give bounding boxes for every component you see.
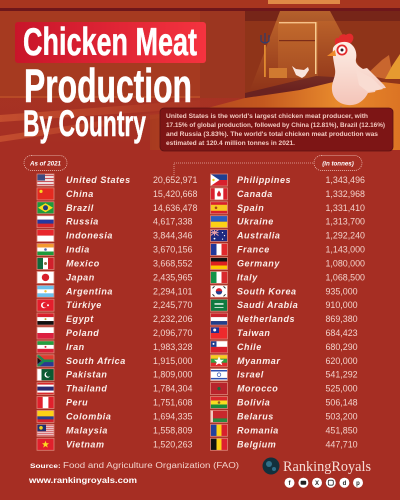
row: Belarus: Belarus [237, 411, 274, 421]
row: Pakistan [37, 369, 193, 381]
row: Türkiye: Türkiye [66, 300, 102, 310]
row: Morocco: 525,000 [326, 384, 358, 394]
label: As of 2021: As of 2021 [29, 160, 62, 168]
row: Chile: Chile [237, 342, 262, 352]
row: China: China [66, 189, 94, 199]
row: Türkiye [37, 299, 193, 311]
summary callout: estimated at 120.4 million tonnes in 2021. [166, 140, 295, 147]
row: Indonesia: 3,844,346 [153, 231, 193, 241]
row: France: France [237, 244, 270, 254]
row: Romania [210, 424, 358, 436]
row: Malaysia: Malaysia [66, 425, 108, 435]
row: Germany [210, 258, 365, 270]
brand name: RankingRoyals [283, 459, 371, 475]
row: Vietnam: 1,520,263 [153, 439, 193, 449]
row: China [37, 188, 197, 200]
row: Mexico: Mexico [66, 258, 100, 268]
row: Myanmar [210, 355, 358, 367]
row: Israel [210, 369, 358, 381]
row: Italy [210, 271, 365, 283]
social icons [284, 478, 363, 488]
website: www.rankingroyals.com [28, 475, 137, 485]
row: Philippines: Philippines [237, 175, 291, 185]
row: Brazil: 14,636,478 [153, 203, 197, 213]
row: Belgium: 447,710 [326, 439, 358, 449]
row: Israel: 541,292 [326, 370, 358, 380]
row: France: 1,143,000 [326, 244, 365, 254]
label: in tonnes: (in tonnes) [322, 160, 354, 168]
row: Pakistan: 1,809,000 [153, 370, 193, 380]
row: Netherlands: 869,380 [326, 314, 358, 324]
row: Belgium [210, 438, 358, 450]
row: Chile [210, 341, 358, 353]
row: Italy: Italy [237, 272, 258, 282]
row: Iran [37, 341, 193, 353]
row: Egypt: 2,232,206 [153, 314, 193, 324]
row: Pakistan: Pakistan [66, 370, 107, 380]
social icons: d [343, 481, 347, 487]
row: Vietnam [37, 438, 193, 450]
row: Poland [37, 327, 193, 339]
icon: hen [327, 34, 386, 109]
label: As of 2021 [24, 156, 67, 170]
row: Saudi Arabia: 910,000 [326, 300, 358, 310]
label: in tonnes [174, 156, 362, 175]
row: Israel: Israel [237, 370, 264, 380]
right column table [210, 174, 365, 450]
row: Poland: 2,096,770 [153, 328, 193, 338]
row: Chile: 680,290 [326, 342, 358, 352]
row: Poland: Poland [66, 328, 99, 338]
row: South Korea: South Korea [237, 286, 297, 296]
row: Belarus [210, 410, 358, 422]
icon: RankingRoyals logo [262, 458, 280, 474]
row: South Africa [37, 355, 193, 367]
row: Germany: Germany [237, 258, 280, 268]
row: Australia: Australia [236, 231, 280, 241]
row: United States: United States [66, 175, 131, 185]
row: Netherlands [210, 313, 358, 325]
row: Brazil: Brazil [66, 203, 94, 213]
summary callout: 17.15% of global production, followed by China (12.81%), Brazil (12.16%) [166, 122, 385, 129]
row: Peru [37, 396, 193, 408]
row: Japan: 2,435,965 [153, 272, 193, 282]
row: Taiwan: Taiwan [237, 328, 270, 338]
row: United States [37, 174, 197, 186]
row: Saudi Arabia [210, 299, 358, 311]
row: Argentina: Argentina [65, 286, 113, 296]
row: Canada: Canada [237, 189, 273, 199]
row: Malaysia: 1,558,809 [153, 425, 193, 435]
source line: Source: Food and Agriculture Organization (FAO) [30, 461, 239, 470]
row: South Africa: South Africa [66, 356, 126, 366]
row: Myanmar: Myanmar [237, 356, 280, 366]
row: Canada [210, 188, 365, 200]
row: Russia: 4,617,338 [153, 217, 193, 227]
row: Egypt [37, 313, 193, 325]
row: Thailand [37, 383, 193, 395]
row: Philippines [210, 174, 365, 186]
row: Romania: Romania [237, 425, 279, 435]
row: Brazil [37, 202, 197, 214]
row: Russia [37, 216, 193, 228]
row: Bolivia: Bolivia [237, 398, 270, 408]
row: Morocco: Morocco [237, 384, 278, 394]
row: Vietnam: Vietnam [66, 439, 105, 449]
summary callout: United States is the world's largest chicken meat producer, with [166, 113, 368, 120]
row: India: 3,670,156 [153, 244, 193, 254]
row: Australia [210, 230, 365, 242]
row: Belgium: Belgium [237, 439, 276, 449]
row: Italy: 1,068,500 [326, 272, 365, 282]
title: Production: Production [24, 59, 192, 112]
row: Thailand: Thailand [66, 384, 107, 394]
row: Australia: 1,292,240 [326, 231, 365, 241]
row: Ukraine: 1,313,700 [326, 217, 365, 227]
social icons: X [315, 481, 319, 487]
row: Belarus: 503,200 [326, 411, 358, 421]
row: Peru: Peru [66, 398, 88, 408]
row: Mexico [37, 258, 193, 270]
row: Bolivia [210, 396, 358, 408]
row: Argentina [37, 285, 193, 297]
row: Mexico: 3,668,552 [153, 258, 193, 268]
row: Netherlands: Netherlands [237, 314, 295, 324]
row: South Africa: 1,915,000 [153, 356, 193, 366]
row: Colombia: 1,694,335 [153, 411, 193, 421]
row: Egypt: Egypt [66, 314, 94, 324]
row: Taiwan [210, 327, 358, 339]
row: Spain [210, 202, 365, 214]
summary callout: and Russia (3.83%). The world's total chicken meat production was [166, 131, 379, 138]
title: By Country: By Country [23, 103, 146, 144]
row: Myanmar: 620,000 [326, 356, 358, 366]
left column table [37, 174, 197, 450]
row: Germany: 1,080,000 [326, 258, 365, 268]
row: Spain: Spain [237, 203, 264, 213]
row: Colombia [37, 410, 193, 422]
row: Türkiye: 2,245,770 [153, 300, 193, 310]
row: Indonesia [37, 230, 193, 242]
barn scene [0, 0, 400, 150]
title: Chicken Meat: Chicken Meat [23, 21, 197, 64]
row: Saudi Arabia: Saudi Arabia [237, 300, 298, 310]
row: Philippines: 1,343,496 [326, 175, 365, 185]
row: China: 15,420,668 [153, 189, 197, 199]
row: Malaysia [37, 424, 193, 436]
row: South Korea: 935,000 [326, 286, 358, 296]
row: Indonesia: Indonesia [66, 231, 113, 241]
row: Russia: Russia [66, 217, 99, 227]
summary callout [160, 108, 393, 151]
row: Spain: 1,331,410 [326, 203, 365, 213]
row: Argentina: 2,294,101 [153, 286, 193, 296]
row: South Korea [210, 285, 358, 297]
row: Ukraine [210, 216, 365, 228]
row: Japan: Japan [66, 272, 95, 282]
row: Romania: 451,850 [326, 425, 358, 435]
row: Ukraine: Ukraine [237, 217, 274, 227]
row: Taiwan: 684,423 [326, 328, 358, 338]
row: Thailand: 1,784,304 [153, 384, 193, 394]
row: Peru: 1,751,608 [153, 398, 193, 408]
row: Iran: Iran [66, 342, 85, 352]
row: Colombia: Colombia [66, 411, 111, 421]
row: Morocco [210, 383, 358, 395]
row: United States: 20,652,971 [153, 175, 197, 185]
row: India: India [66, 244, 90, 254]
social icons: f [288, 481, 292, 487]
row: Japan [37, 271, 193, 283]
social icons: p [356, 481, 360, 487]
row: France [210, 244, 365, 256]
row: Bolivia: 506,148 [326, 398, 358, 408]
row: Canada: 1,332,968 [326, 189, 365, 199]
row: Iran: 1,983,328 [153, 342, 193, 352]
row: India [37, 244, 193, 256]
